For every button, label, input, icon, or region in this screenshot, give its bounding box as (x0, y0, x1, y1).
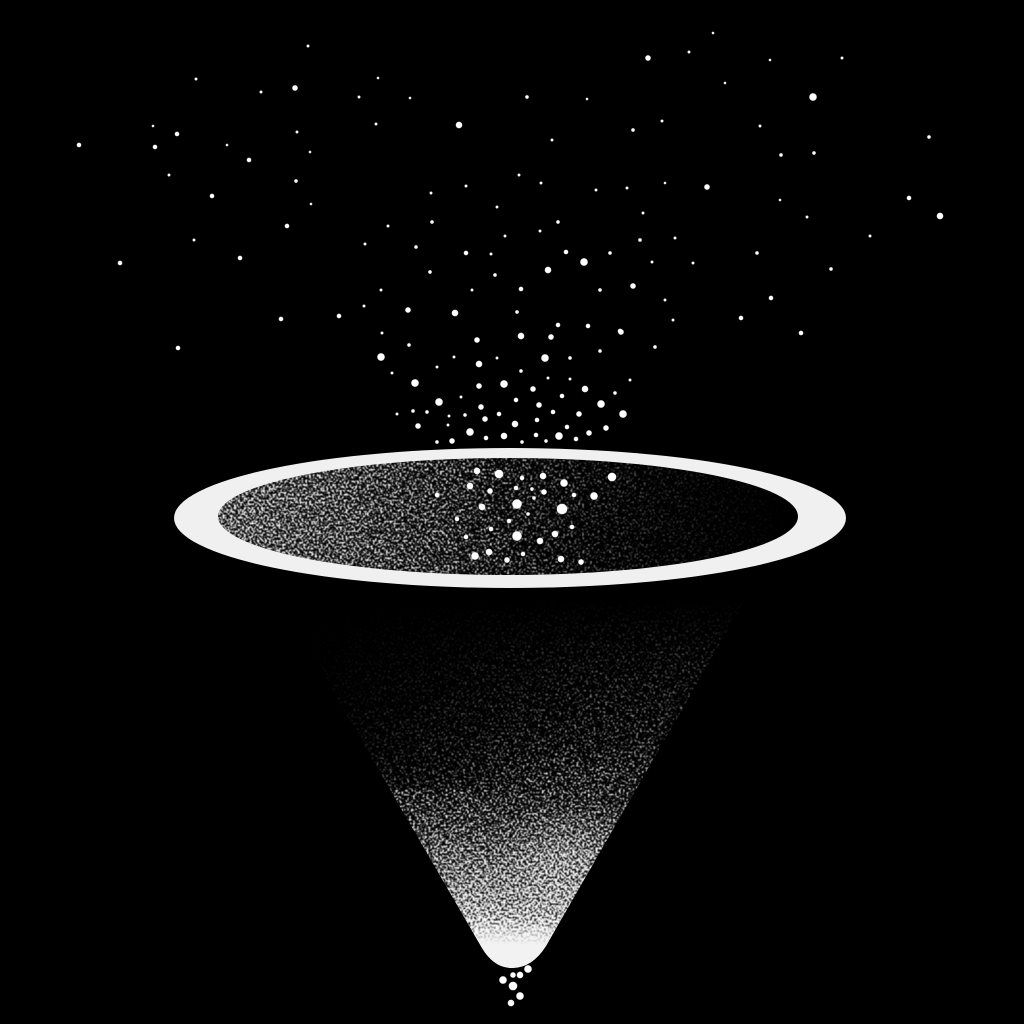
particles: dropping from the funnel tip (500, 966, 532, 1006)
funnel cone: grainy gradient (333, 608, 737, 968)
ring: white ellipse (174, 448, 846, 588)
particles: passing through the ring (435, 468, 616, 564)
particles: dense cluster above the ring (378, 330, 656, 444)
ring opening: grainy gradient (218, 458, 798, 575)
particles: sparse star field (77, 32, 943, 350)
